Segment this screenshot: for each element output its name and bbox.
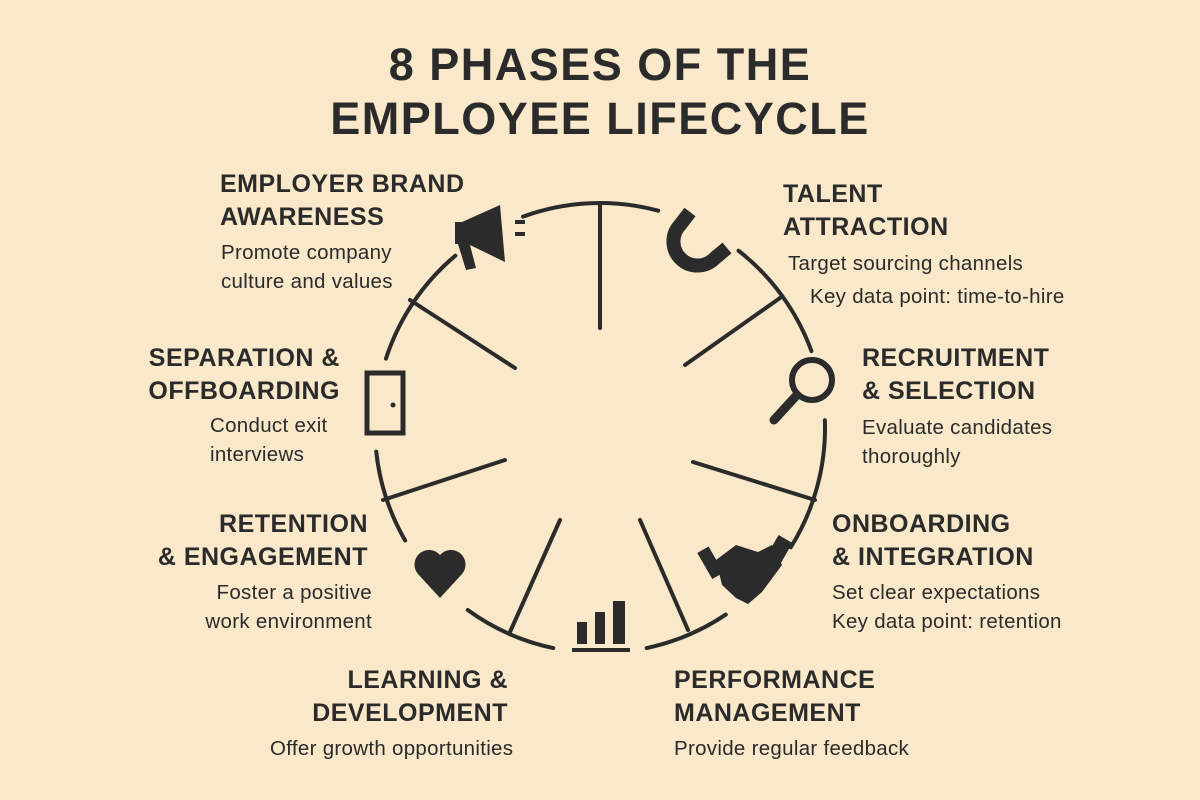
text: Key data point: retention (832, 610, 1062, 633)
text: work environment (205, 610, 372, 633)
text: Offer growth opportunities (270, 737, 513, 760)
phase: performance (674, 666, 909, 760)
text: LEARNING & (347, 666, 508, 694)
text: AWARENESS (220, 203, 384, 231)
text: Set clear expectations (832, 581, 1040, 604)
text: Evaluate candidates (862, 416, 1052, 439)
title: EMPLOYEE LIFECYCLE (330, 93, 870, 144)
text: ATTRACTION (783, 213, 949, 241)
text: MANAGEMENT (674, 699, 861, 727)
phase: onboarding (832, 510, 1062, 633)
text: thoroughly (862, 445, 961, 468)
phase: learning (270, 666, 513, 760)
icon: handshake (697, 535, 792, 604)
title (330, 39, 870, 144)
text: PERFORMANCE (674, 666, 875, 694)
text: Promote company (221, 241, 392, 264)
title: 8 PHASES OF THE (389, 39, 811, 90)
text: culture and values (221, 270, 393, 293)
text: TALENT (783, 180, 883, 208)
icon: bar chart (572, 601, 630, 652)
text: interviews (210, 443, 304, 466)
phase: retention (158, 510, 372, 633)
phase: separation (148, 344, 340, 466)
icon: door (367, 373, 403, 433)
text: & ENGAGEMENT (158, 543, 368, 571)
text: Foster a positive (216, 581, 372, 604)
text: Conduct exit (210, 414, 328, 437)
phase: employer brand (220, 170, 465, 293)
phase: talent attraction (783, 180, 1065, 308)
text: Key data point: time-to-hire (810, 285, 1065, 308)
icon: heart (414, 550, 466, 598)
icon: magnet (673, 212, 727, 266)
text: RECRUITMENT (862, 344, 1049, 372)
text: DEVELOPMENT (312, 699, 508, 727)
text: ONBOARDING (832, 510, 1011, 538)
icon: magnifier (774, 360, 832, 420)
text: SEPARATION & (149, 344, 340, 372)
icon: megaphone (455, 205, 525, 270)
text: Target sourcing channels (788, 252, 1023, 275)
text: Provide regular feedback (674, 737, 909, 760)
text: EMPLOYER BRAND (220, 170, 465, 198)
text: OFFBOARDING (148, 377, 340, 405)
text: & INTEGRATION (832, 543, 1034, 571)
phase: recruitment (862, 344, 1052, 468)
text: & SELECTION (862, 377, 1036, 405)
text: RETENTION (219, 510, 368, 538)
